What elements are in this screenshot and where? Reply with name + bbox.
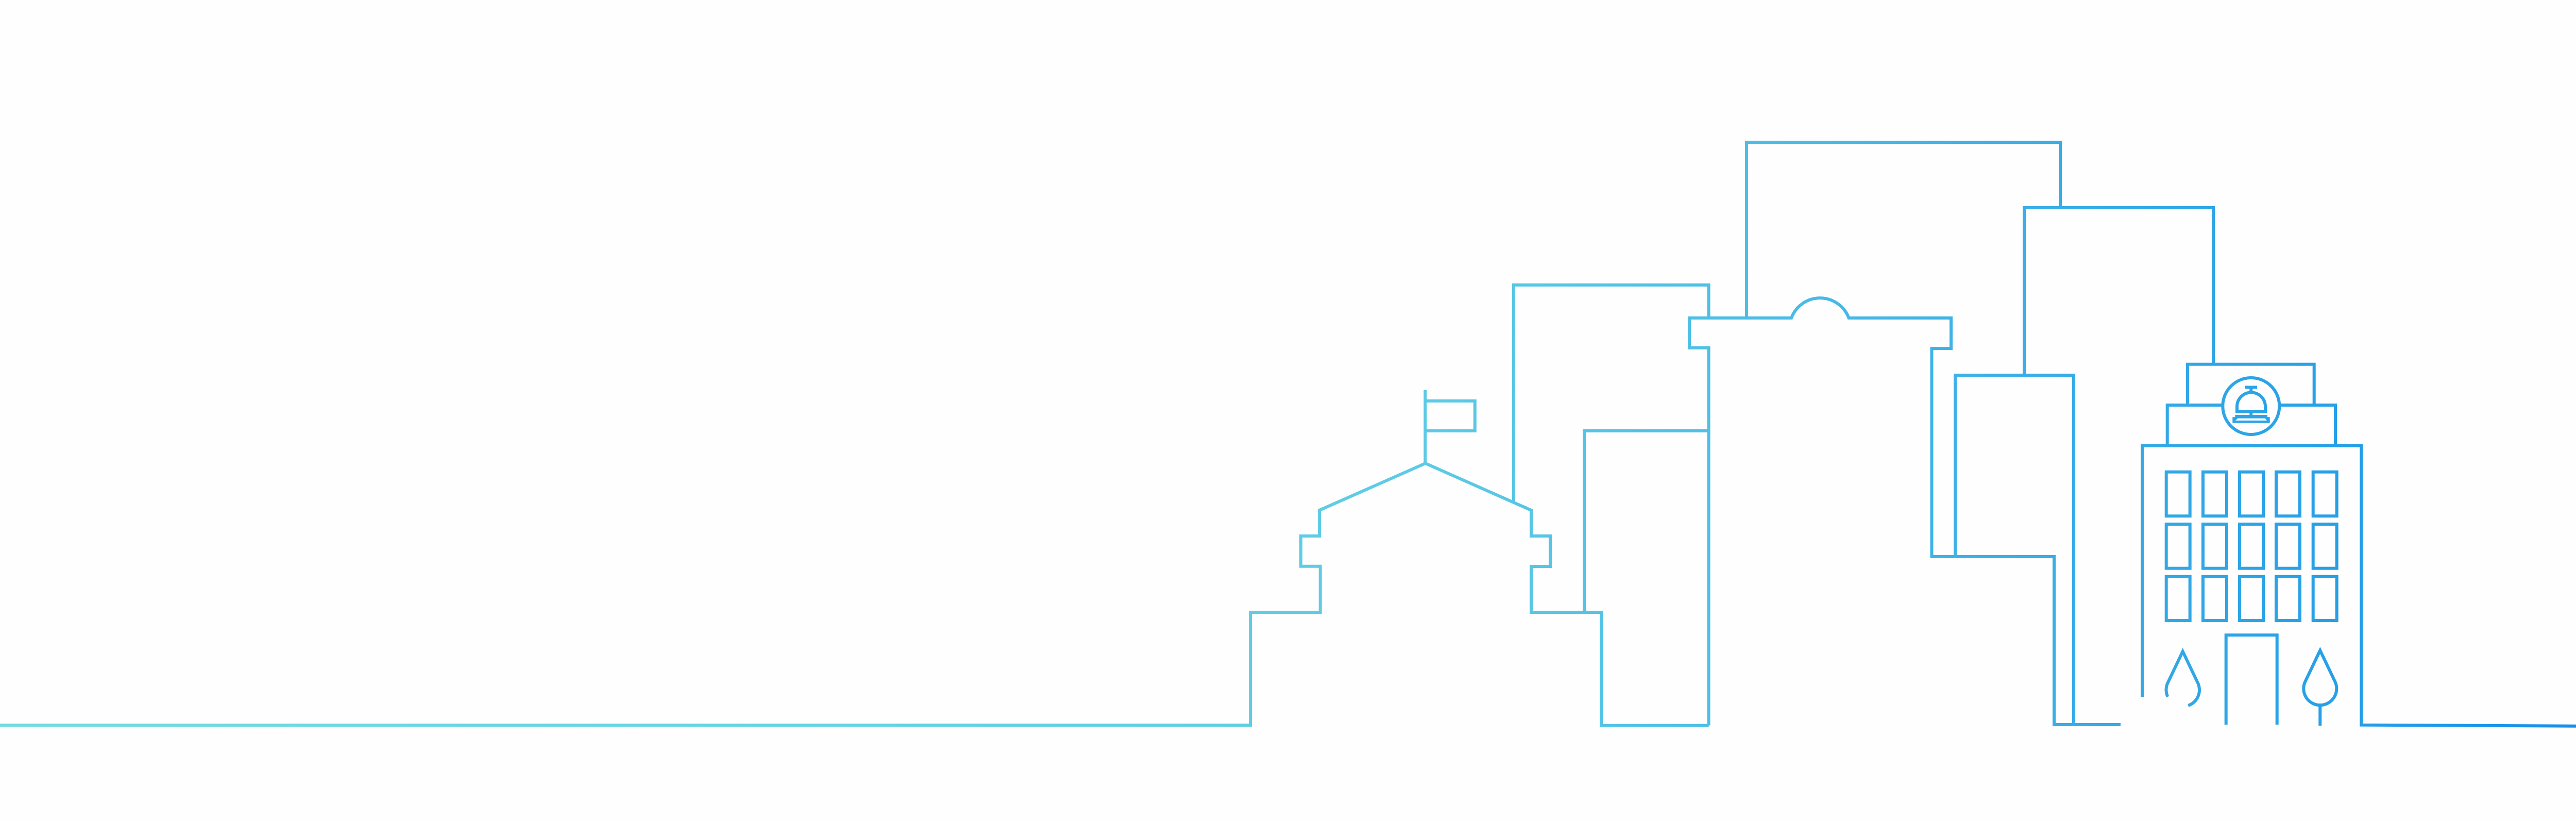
icon: service bell in circle [2223,378,2279,434]
flag on castle roof [1425,390,1475,463]
clock tower hotel building with right ground line [2142,364,2576,727]
tall rear building behind castle [1514,285,1709,502]
icon: right tree [2303,650,2336,726]
entrance door [2226,635,2277,725]
icon: left tree [2166,651,2199,706]
upper right rear building [2024,208,2213,375]
window grid [2166,472,2337,621]
central domed building [1689,298,2121,726]
tower top tier [2188,364,2314,405]
tallest rear building [1747,142,2060,318]
tower middle tier [2167,405,2335,446]
slim building in front of rear tower [1955,375,2074,725]
narrow front building [1584,431,1709,612]
castle building outline with left ground line [0,463,1709,726]
